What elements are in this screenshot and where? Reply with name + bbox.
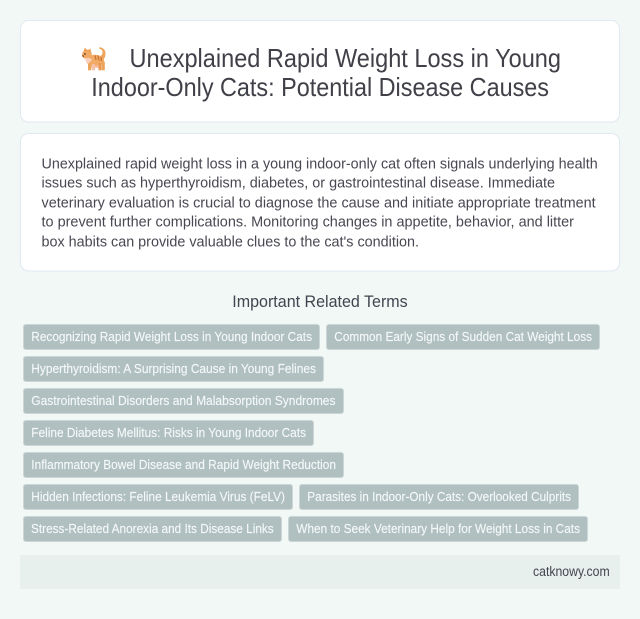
tag: [24, 324, 320, 350]
description text: to prevent further complications. Monitoring changes in appetite, behavior, and litter: [42, 214, 574, 231]
tag: [24, 484, 292, 510]
tag: Inflammatory Bowel Disease and Rapid Weight Reduction: [31, 457, 336, 472]
description text: Unexplained rapid weight loss in a young indoor-only cat often signals underlying health: [42, 155, 598, 172]
tag: [24, 516, 282, 542]
tag: [24, 388, 344, 414]
tag: Parasites in Indoor-Only Cats: Overlooked Culprits: [307, 489, 571, 504]
tag: Feline Diabetes Mellitus: Risks in Young Indoor Cats: [31, 425, 306, 440]
tag: [24, 452, 344, 478]
tag: Common Early Signs of Sudden Cat Weight Loss: [334, 329, 592, 344]
title line 2: Indoor-Only Cats: Potential Disease Causes: [91, 74, 549, 102]
description text: issues such as hyperthyroidism, diabetes, or gastrointestinal disease. Immediate: [42, 175, 555, 192]
panel: description card: [20, 134, 620, 271]
tag: Gastrointestinal Disorders and Malabsorption Syndromes: [31, 393, 336, 408]
heading: important related terms: Important Related Terms: [232, 293, 408, 311]
tag: Hyperthyroidism: A Surprising Cause in Young Felines: [31, 361, 316, 376]
tag: [300, 484, 578, 510]
icon: cat: [82, 47, 106, 70]
tag: Recognizing Rapid Weight Loss in Young Indoor Cats: [31, 329, 312, 344]
tag: [24, 420, 314, 446]
description text: [42, 155, 598, 250]
tag: [288, 516, 588, 542]
tag: Hidden Infections: Feline Leukemia Virus (FeLV): [31, 489, 285, 504]
tag: [326, 324, 600, 350]
description text: box habits can provide valuable clues to the cat's condition.: [42, 233, 419, 250]
description text: veterinary evaluation is crucial to diagnose the cause and initiate appropriate treatment: [42, 194, 596, 211]
footer bar: [20, 555, 620, 589]
panel: related term tags: [24, 324, 600, 542]
tag: [24, 356, 324, 382]
tag: When to Seek Veterinary Help for Weight Loss in Cats: [296, 521, 580, 536]
footer source text: catknowy.com: [533, 564, 610, 579]
panel: title card: [20, 20, 620, 122]
title line 1: Unexplained Rapid Weight Loss in Young: [130, 45, 561, 73]
tag: Stress-Related Anorexia and Its Disease Links: [31, 521, 274, 536]
